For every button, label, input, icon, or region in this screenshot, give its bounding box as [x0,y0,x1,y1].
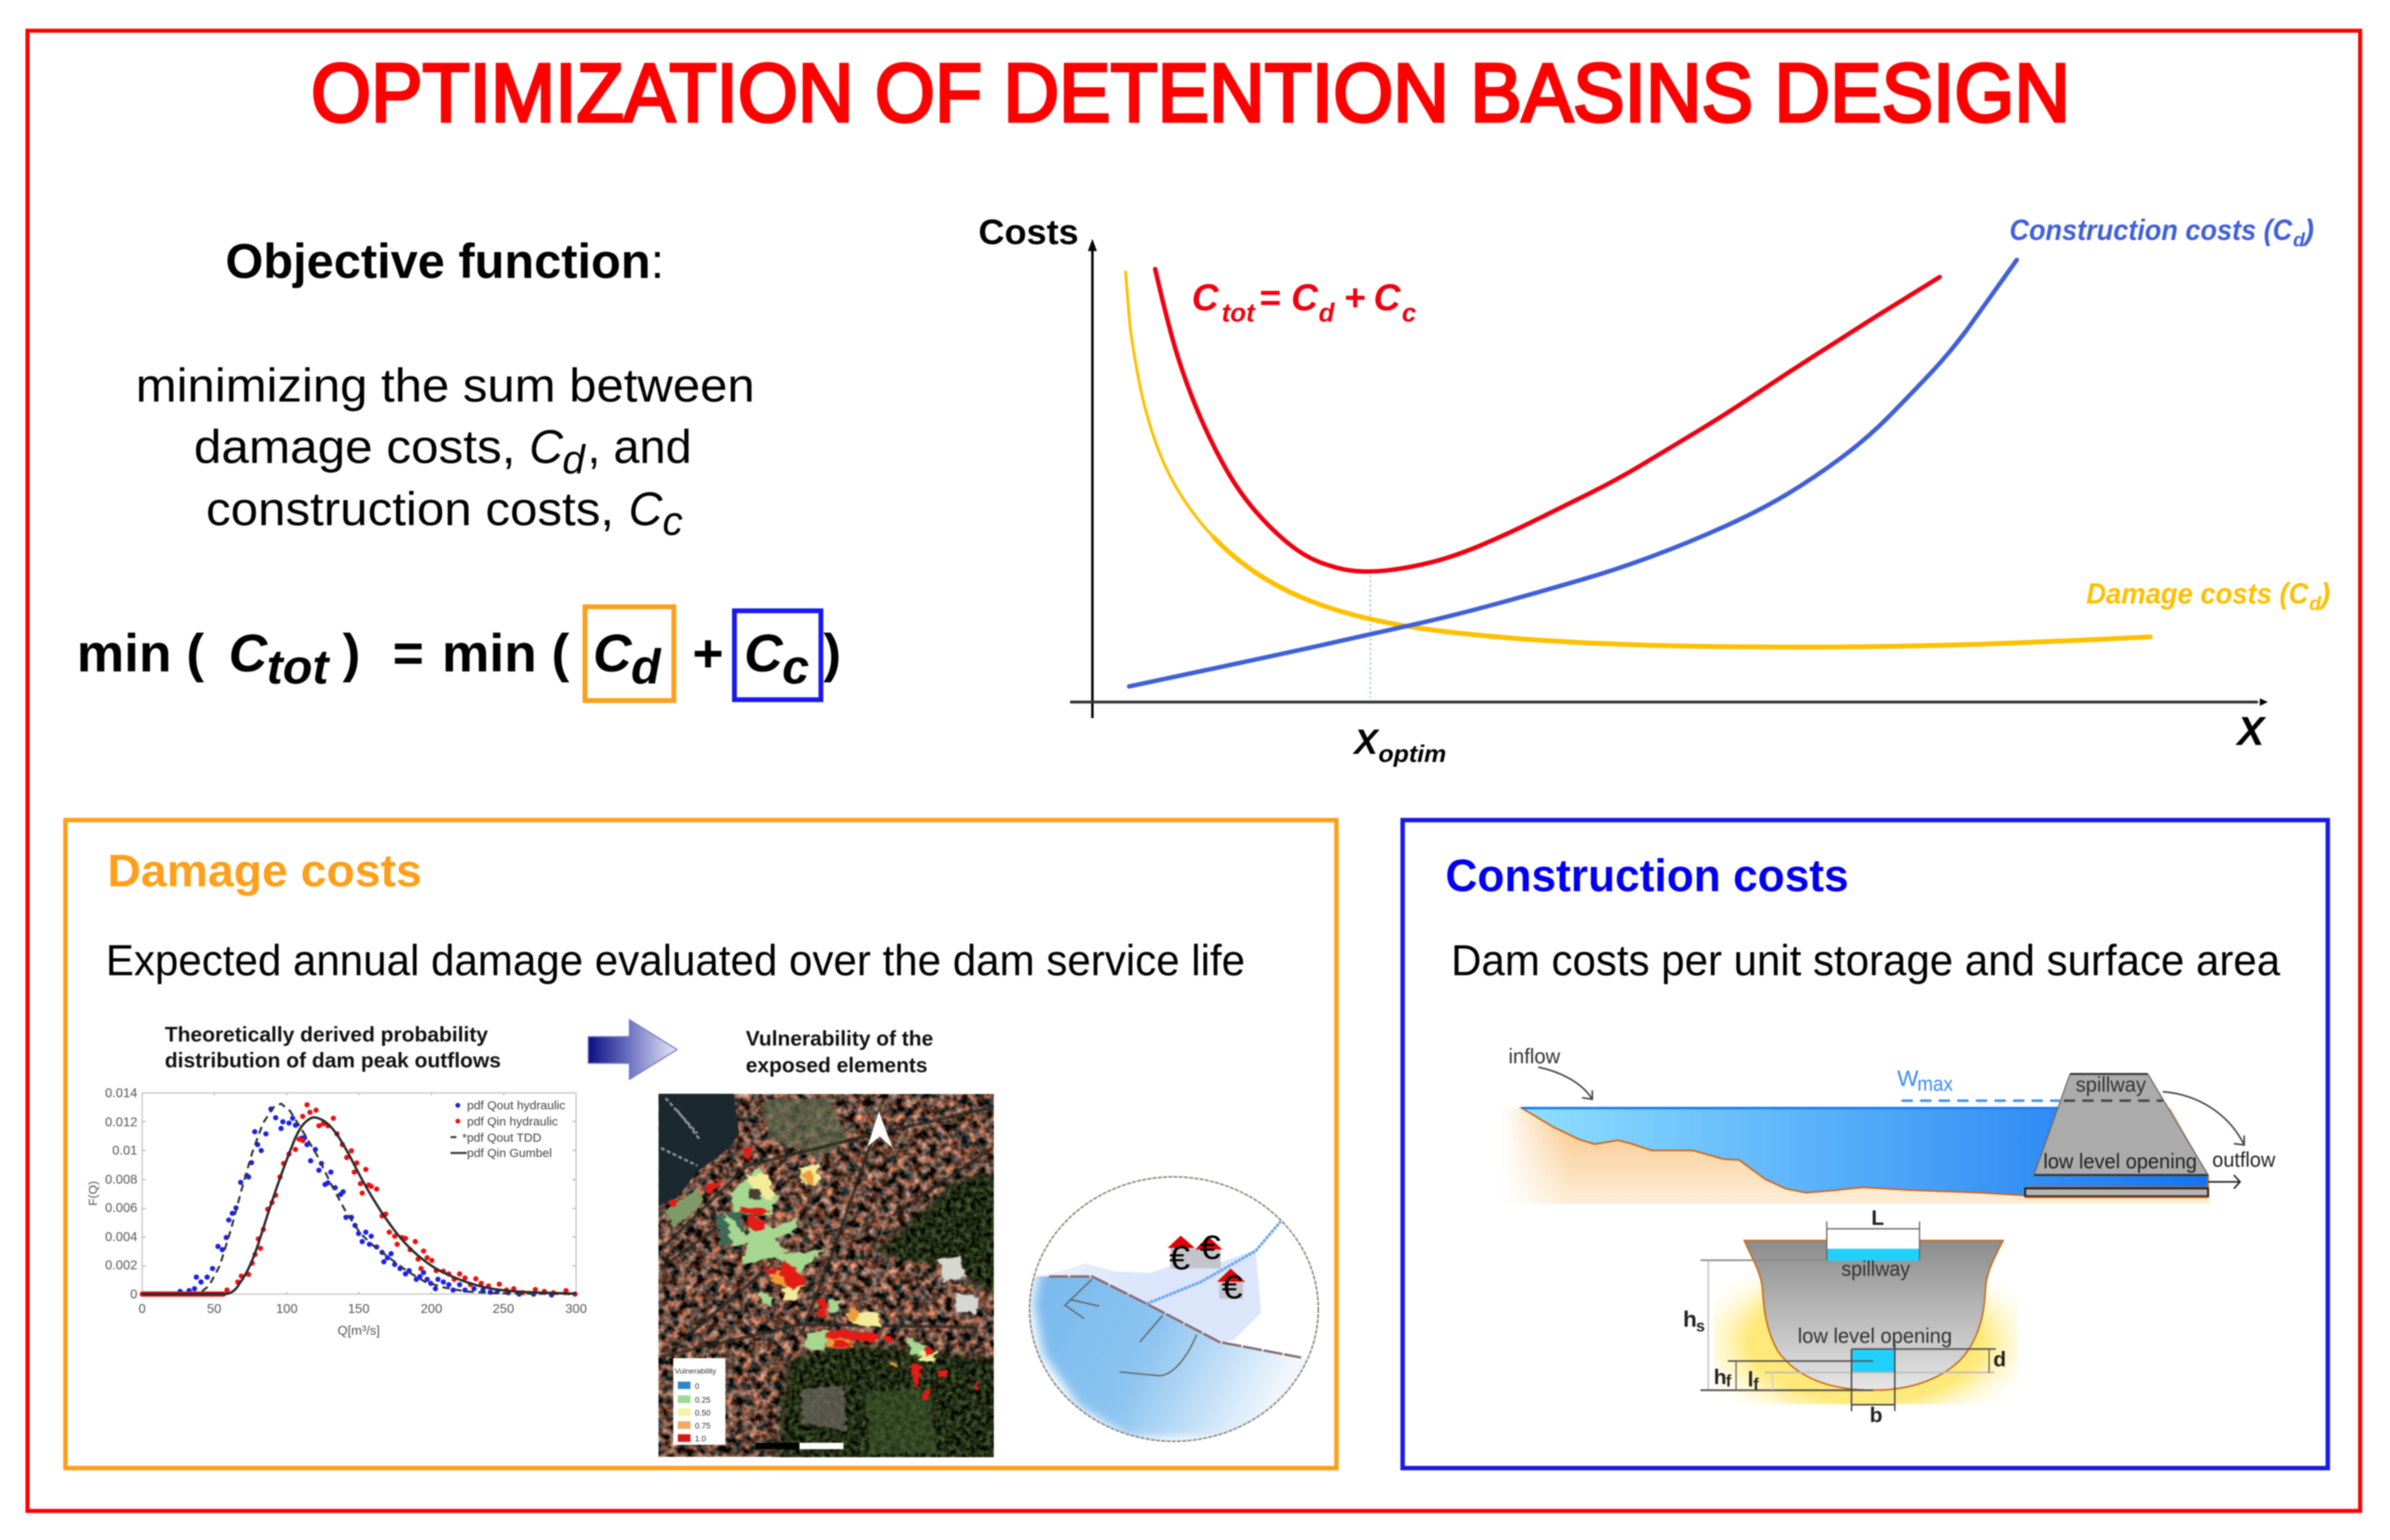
valley [1744,1240,2003,1391]
white sky right of dam [2148,1067,2275,1205]
roads [661,1107,994,1357]
total cost label [1192,276,1416,327]
chart legend [462,1099,566,1160]
cross low level opening label: low level opening [1798,1323,1952,1348]
title: OPTIMIZATION OF DETENTION BASINS DESIGN [311,47,2070,139]
damage heading: Damage costs [107,845,422,897]
objective function text block [136,234,755,544]
total cost label: c [1402,298,1416,327]
orange box [585,607,674,701]
x tick labels: 0 [139,1302,146,1316]
map base [659,1094,994,1457]
hf label [1714,1365,1731,1391]
red points [142,1105,575,1294]
plaza and light buildings [716,1213,745,1245]
house 2 [1190,1236,1222,1269]
damage costs label: ) [2317,577,2330,610]
formula: ) [343,623,360,683]
x tick labels: 300 [566,1302,587,1316]
dam base [2025,1189,2208,1197]
euro signs: € [1222,1268,1243,1306]
x tick labels: 150 [348,1302,369,1316]
x axis label: X [2235,709,2266,754]
vulnerability heading: exposed elements [746,1053,928,1077]
piers [661,1098,700,1166]
sea [659,1094,739,1205]
spillway water [1828,1249,1920,1260]
euro signs: € [1200,1228,1221,1266]
formula: + [692,623,724,683]
cross section shapes [1701,1222,2018,1412]
euro signs [1169,1228,1243,1306]
y axis title: F(Q) [86,1181,100,1205]
vulnerability map [659,1094,1011,1468]
map features [659,1094,1011,1468]
map legend text: 1.0 [695,1435,706,1444]
vulnerability orange areas [768,1170,897,1366]
formula: ) [823,623,841,683]
total cost label: = [1259,276,1281,318]
chart legend: *pdf Qout TDD [462,1131,541,1145]
y tick labels [105,1087,137,1302]
objective description line 2: , and [587,421,692,473]
coast line [1049,1277,1301,1357]
outflow curve arrow [2163,1092,2245,1145]
construction costs label: ) [2301,213,2314,246]
w max label: max [1917,1071,1953,1096]
construction curve [1130,260,2017,687]
objective description line 1: minimizing the sum between [136,360,755,412]
euro signs: € [1169,1239,1190,1277]
house 3 [1217,1269,1245,1298]
x axis title: Q[m³/s] [338,1324,380,1338]
probability chart heading: distribution of dam peak outflows [165,1048,501,1072]
map legend text: 0.75 [695,1422,711,1431]
formula: min ( [77,623,204,683]
objective description line 2: C [529,421,564,473]
dark centre of block [750,1189,763,1200]
x optimum label [1352,722,1446,768]
panel: construction costs [1403,820,2328,1468]
water level dashes [1901,1100,2060,1102]
objective heading: Objective function: [225,234,664,288]
probability chart heading: Theoretically derived probability [165,1022,489,1046]
section shapes [1502,1067,2275,1205]
map legend text: Vulnerability [675,1367,717,1376]
y tick labels: 0.002 [105,1259,137,1273]
inflow label: inflow [1508,1044,1560,1068]
flood circle illustration [1029,1177,1319,1441]
forest [871,1168,995,1299]
map legend box [673,1358,726,1445]
vulnerability heading [746,1026,933,1077]
damage description: Expected annual damage evaluated over the dam service life [106,936,1245,985]
y axis title: Costs [978,212,1079,252]
map legend text: 0 [695,1382,700,1391]
formula: min ( [442,623,570,683]
house 1 [1168,1235,1195,1269]
outflow label: outflow [2212,1147,2275,1172]
x optimum label: X [1352,722,1380,762]
hs label [1683,1306,1705,1336]
y tick labels: 0.004 [105,1231,137,1244]
probability line chart [86,1087,587,1338]
cross spillway label: spillway [1841,1256,1910,1281]
damage costs label: d [2309,593,2322,615]
circle outline [1029,1177,1319,1441]
y tick labels: 0.008 [105,1173,137,1187]
total cost label: + [1344,276,1365,318]
y tick labels: 0.012 [105,1116,137,1130]
total cost label: tot [1222,298,1256,327]
arrow [588,1020,677,1079]
objective description line 3: c [663,499,683,544]
lf label [1748,1367,1759,1394]
breakwaters [1065,1279,1197,1376]
plot shapes [142,1093,576,1295]
river [1147,1222,1281,1304]
vulnerability heading: Vulnerability of the [746,1026,933,1050]
objective description line 3: construction costs, [206,483,614,536]
blue box [734,611,821,700]
map scale bar [755,1443,844,1450]
cost curves chart [978,212,2330,768]
formula: tot [267,640,331,694]
objective description line 2: damage costs, [194,421,515,473]
construction costs label: d [2293,229,2306,251]
dam longitudinal section [1502,1044,2275,1205]
solid inflow curve [142,1117,576,1294]
vulnerability yellow areas [747,1163,938,1361]
formula: C [593,623,633,683]
axes and curves [1070,239,2268,718]
chart legend: pdf Qin hydraulic [467,1115,558,1129]
y tick labels: 0.006 [105,1201,137,1215]
lf label: l [1748,1367,1753,1391]
vulnerability red areas [670,1148,978,1399]
lf label: f [1753,1376,1759,1394]
dashed outflow curve [142,1104,576,1294]
y tick labels: 0.01 [112,1144,137,1158]
water body [1521,1108,2208,1196]
construction heading: Construction costs [1445,850,1849,902]
formula: C [744,623,784,683]
probability chart heading [165,1022,501,1072]
panel: damage costs [65,820,1336,1468]
chart legend: pdf Qout hydraulic [467,1099,566,1113]
map legend text [675,1367,717,1444]
vulnerability green areas [725,1168,933,1360]
x tick labels: 100 [276,1302,297,1316]
d label: d [1993,1347,2006,1371]
total cost label: C [1374,276,1401,318]
construction description: Dam costs per unit storage and surface area [1451,936,2281,985]
w max label [1897,1066,1953,1096]
w max label: W [1897,1066,1919,1091]
x tick labels: 50 [207,1302,221,1316]
north arrow [868,1111,893,1148]
map legend text: 0.25 [695,1396,711,1405]
formula: = [393,623,424,683]
hf label: h [1714,1365,1727,1389]
hf label: f [1726,1373,1731,1391]
map legend text: 0.50 [695,1409,711,1418]
x tick labels: 250 [493,1302,514,1316]
inflow arrow [1538,1067,1593,1100]
hs label: s [1696,1318,1705,1336]
spillway opening [1827,1236,1920,1249]
formula [77,607,841,701]
y tick labels: 0.014 [105,1087,137,1100]
parks [761,1096,847,1157]
damage curve [1126,272,2150,647]
L label: L [1871,1205,1884,1230]
objective description line 2: d [562,437,587,482]
hs label: h [1683,1306,1697,1332]
x tick labels: 200 [421,1302,442,1316]
total cost label: d [1319,298,1336,327]
objective description line 2 [194,421,692,482]
formula: c [782,640,809,694]
total cost curve [1155,269,1940,571]
legend markers [456,1103,461,1108]
total cost label: C [1291,276,1319,318]
objective description line 3: C [629,483,663,536]
total cost label: C [1192,276,1219,318]
outflow straight arrow [2208,1175,2240,1189]
x tick labels [139,1302,587,1316]
low level opening water [1852,1349,1895,1373]
construction costs label: Construction costs (C [2009,213,2293,246]
y tick labels: 0 [130,1288,137,1302]
sea [1033,1269,1319,1437]
b label: b [1870,1403,1883,1427]
chart legend: pdf Qin Gumbel [467,1147,552,1160]
circle shapes [1029,1177,1319,1441]
x optimum label: optim [1378,741,1446,768]
damage costs label: Damage costs (C [2086,577,2309,610]
formula: d [631,640,662,694]
blue points [180,1109,552,1295]
low level opening label: low level opening [2043,1149,2197,1173]
dam cross section [1683,1205,2018,1427]
formula: C [229,623,268,683]
dam body [2034,1074,2208,1175]
flooded area [1037,1249,1261,1342]
spillway label: spillway [2076,1072,2146,1096]
